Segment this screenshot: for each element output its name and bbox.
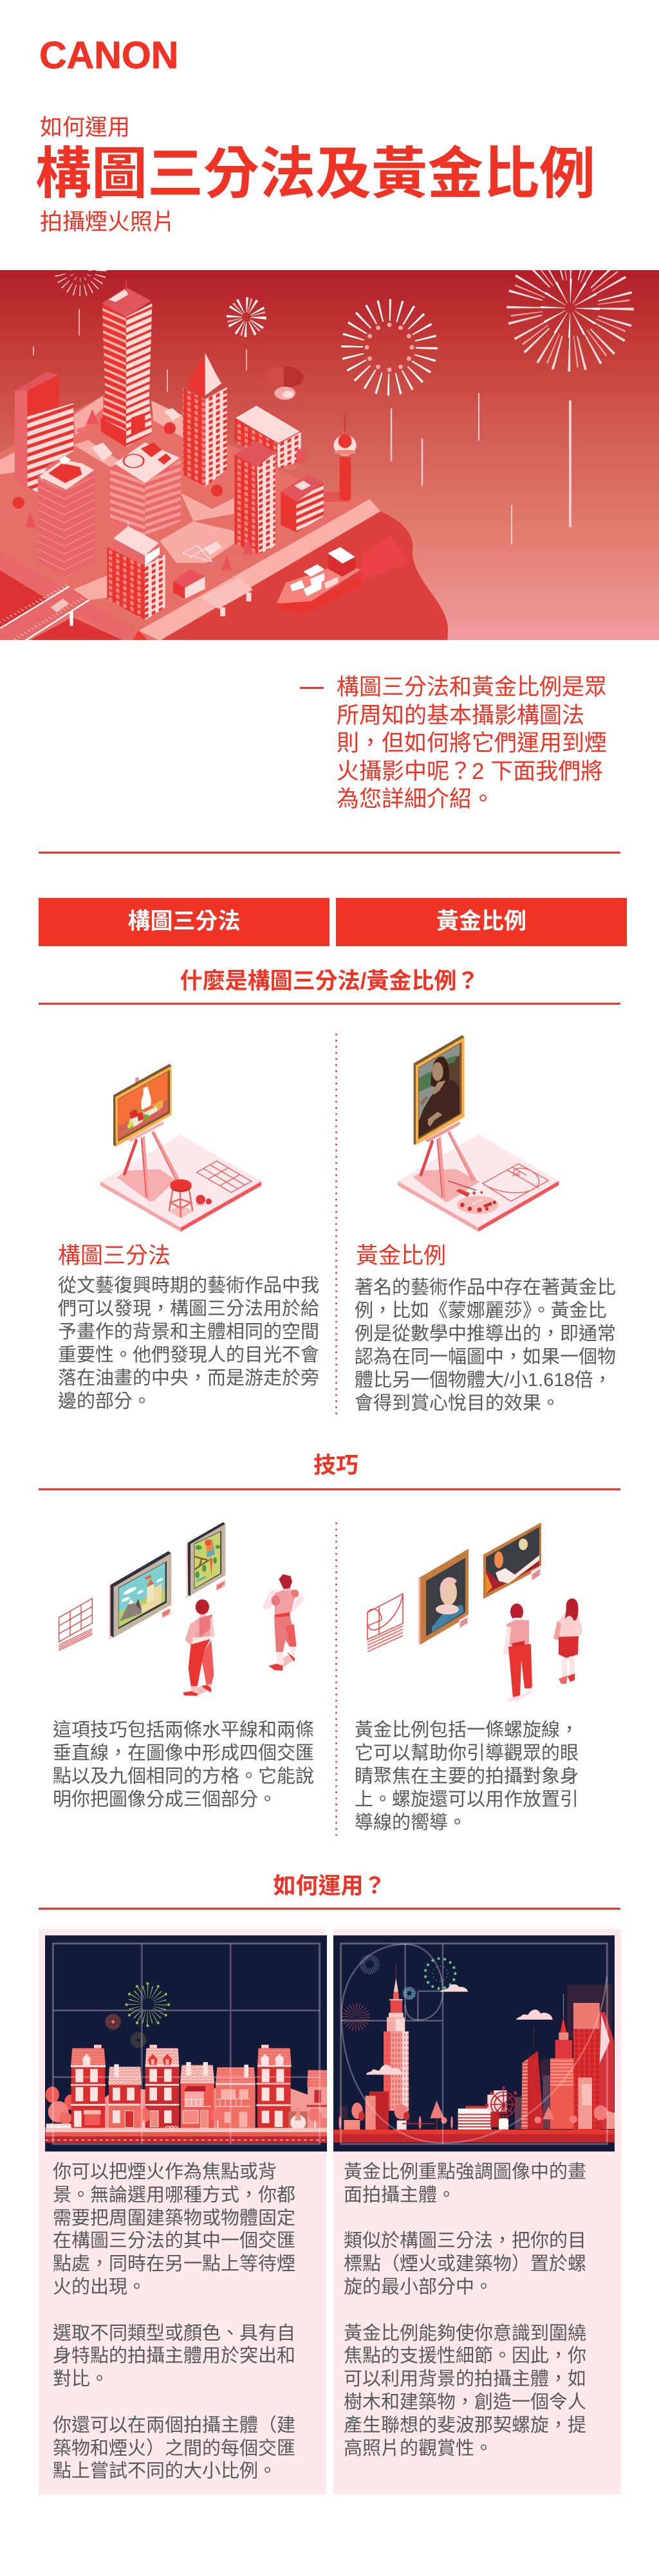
body: golden usage: 黃金比例重點強調圖像中的畫 面拍攝主體。 類似於構圖三分法，把你的目 標點（煙火或建築物）置於螺 旋的最小部分中。 黃金比例能夠使你意識到圍繞 焦點的支援性細節。因此，你 可以利用背景的拍攝主體，如 樹木和建築物，創造一個令人 產生聯想的斐波那契螺旋，提 高照片的觀賞性。 xyxy=(344,2162,586,2459)
tab: golden ratio xyxy=(336,898,627,946)
firework: faint white xyxy=(362,1957,376,1971)
panel: thirds usage background xyxy=(39,1929,326,2494)
logo: Canon: CANON xyxy=(39,34,178,77)
illustration: skyline with fireworks and golden spiral xyxy=(333,1935,615,2151)
stool xyxy=(169,1180,193,1218)
easel legs xyxy=(421,1121,476,1198)
body: rule of thirds: 從文藝復興時期的藝術作品中我 們可以發現，構圖三分法用於給 予畫作的背景和主體相同的空間 重要性。他們發現人的目光不會 落在油畫的中央，而是游走於旁 邊的部分。 xyxy=(58,1275,319,1412)
building: front window block xyxy=(107,521,165,620)
intro dash xyxy=(300,687,324,689)
building: flat roof block xyxy=(234,405,301,468)
illustration: easel with Mona Lisa and golden spiral xyxy=(398,1035,559,1232)
canvas: still life painting xyxy=(113,1064,172,1147)
promenade xyxy=(138,499,380,641)
spiral chart on wall xyxy=(367,1594,403,1652)
tab: golden ratio: 黃金比例 xyxy=(436,909,526,934)
body: thirds usage: 你可以把煙火作為焦點或背 景。無論選用哪種方式，你都 需要把周圍建築物或物體固定 在構圖三分法的其中一個交匯 點處，同時在另一點上等待煙 火的出現。 選取不同類型或顏色、具有自 身特點的拍攝主體用於突出和 對比。 你還可以在兩個拍攝主體（建 築物和煙火）之間的每個交匯 點上嘗試不同的大小比例。 xyxy=(53,2162,295,2481)
trees xyxy=(3,448,306,579)
painting label xyxy=(162,1608,171,1618)
house 2 xyxy=(108,2064,142,2128)
person: woman viewer xyxy=(553,1598,582,1684)
small house xyxy=(173,569,205,599)
firework: top left xyxy=(60,250,101,291)
painting: castle xyxy=(109,1551,172,1640)
low left blocks xyxy=(344,2092,389,2130)
building: main tall tower xyxy=(101,280,152,448)
balls xyxy=(196,1195,212,1206)
house 3 xyxy=(145,2045,179,2128)
golden spiral and grid overlay xyxy=(341,1944,607,2144)
firework: blue xyxy=(405,1989,414,1998)
rule of thirds grid overlay xyxy=(53,1944,320,2144)
body: golden ratio: 著名的藝術作品中存在著黃金比 例，比如《蒙娜麗莎》。黃金比 例是從數學中推導出的，即通常 認為在同一幅圖中，如果一個物 體比另一個物體大/小1.618倍， 會得到賞心悅目的效果。 xyxy=(355,1277,616,1414)
body: technique golden ratio: 黃金比例包括一條螺旋線， 它可以幫助你引導觀眾的眼 睛聚焦在主要的拍攝對象身 上。螺旋還可以用作放置引 導線的嚮導。 xyxy=(355,1720,579,1833)
brush and paint tube xyxy=(449,1181,483,1197)
person: man viewer xyxy=(503,1603,532,1701)
firework: orange xyxy=(107,2016,118,2027)
upper cloud xyxy=(440,1984,468,1992)
panel: golden usage background xyxy=(333,1929,621,2494)
thirds grid chart on wall xyxy=(59,1598,92,1650)
firework: red star xyxy=(349,2009,364,2025)
glass tower right xyxy=(573,2003,600,2130)
right trees xyxy=(534,2105,608,2130)
firework: green dots xyxy=(425,1959,455,1989)
building: tall front tower xyxy=(234,441,275,554)
golden spiral on floor xyxy=(483,1164,548,1201)
skyline back blocks xyxy=(339,1985,612,2129)
firework: yellow xyxy=(134,2035,143,2045)
painting label xyxy=(531,1566,541,1582)
left trees and fence xyxy=(46,2087,77,2131)
easel legs xyxy=(124,1121,180,1198)
intro text: 構圖三分法和黃金比例是眾 所周知的基本攝影構圖法 則，但如何將它們運用到煙 火攝影中呢？2 下面我們將 為您詳細介紹。 xyxy=(337,675,607,812)
building: curved tower center with helipad xyxy=(110,443,181,536)
diagonal avenue xyxy=(0,552,148,641)
right cloud xyxy=(516,2009,553,2020)
heading: how to use: 如何運用？ xyxy=(273,1874,386,1899)
tab: rule of thirds: 構圖三分法 xyxy=(127,909,241,934)
title: 構圖三分法及黃金比例 xyxy=(35,143,595,205)
painting label xyxy=(459,1614,469,1629)
gate between houses xyxy=(288,2105,308,2130)
subtitle: 拍攝煙火照片 xyxy=(40,210,175,235)
bridge with railings xyxy=(0,585,89,641)
hill and background xyxy=(103,2088,308,2129)
thirds grid on floor xyxy=(197,1161,252,1192)
house 1 xyxy=(71,2045,106,2128)
sky background xyxy=(0,270,659,640)
roads xyxy=(0,396,234,600)
painting: portrait of woman xyxy=(418,1549,469,1645)
kicker text: 如何運用 xyxy=(40,115,130,140)
blimp xyxy=(263,367,304,400)
pier xyxy=(201,578,253,616)
painting: parrot xyxy=(186,1522,226,1599)
city artwork xyxy=(0,280,448,641)
tree cluster back xyxy=(77,409,176,441)
heading: technique: 技巧 xyxy=(313,1453,358,1478)
subheading: rule of thirds: 構圖三分法 xyxy=(58,1243,171,1268)
tower with spire right xyxy=(550,1994,577,2129)
platform xyxy=(100,1135,261,1232)
house 7 xyxy=(307,2070,328,2129)
canvas: Mona Lisa xyxy=(414,1035,465,1145)
firework: small center xyxy=(234,305,259,329)
platform xyxy=(398,1134,559,1232)
house 5 xyxy=(216,2065,255,2128)
house 6 xyxy=(256,2045,292,2128)
firework: medium center xyxy=(352,310,427,385)
rising firework trails xyxy=(33,309,570,544)
ground band xyxy=(333,2130,615,2142)
dark corner land xyxy=(0,571,67,639)
land xyxy=(0,396,380,641)
cargo ship xyxy=(277,547,362,614)
body: technique rule of thirds: 這項技巧包括兩條水平線和兩條 垂直線，在圖像中形成四個交匯 點以及九個相同的方格。它能說 明你把圖像分成三個部分。 xyxy=(53,1720,314,1810)
easel peg xyxy=(135,1077,140,1084)
building: curved tower front left xyxy=(38,456,95,578)
ship wake xyxy=(362,534,410,580)
firework: large top right xyxy=(524,262,617,354)
sea xyxy=(160,511,448,641)
tall tower left xyxy=(384,1965,409,2111)
firework: green xyxy=(127,1984,169,2025)
ferris wheel xyxy=(485,2087,517,2130)
building: striped curved tower xyxy=(27,403,73,493)
street trees xyxy=(136,2108,322,2134)
painting: reclining figure xyxy=(483,1522,541,1599)
building: small office xyxy=(281,474,324,533)
parked cars and road crossing xyxy=(91,443,222,562)
illustration: easel with still life and thirds grid xyxy=(100,1064,261,1232)
curved skyscraper xyxy=(521,2028,544,2129)
building: spire tower xyxy=(183,352,227,487)
paint palette xyxy=(457,1196,499,1214)
road xyxy=(46,2128,327,2143)
low river bridge xyxy=(402,2122,434,2125)
tab: rule of thirds xyxy=(39,898,330,946)
house 4 xyxy=(180,2062,214,2128)
building: slab back left xyxy=(15,372,59,488)
striped low building xyxy=(458,2106,499,2130)
illustration: street with fireworks and thirds grid xyxy=(45,1935,327,2151)
illustration: gallery viewers with thirds paintings xyxy=(59,1522,305,1696)
observation tower xyxy=(324,414,357,502)
illustration: gallery viewers with golden ratio paintings xyxy=(367,1522,582,1701)
hero illustration: isometric city with fireworks xyxy=(0,270,659,640)
car on road xyxy=(164,408,181,421)
left trees xyxy=(339,2101,453,2130)
bicycle xyxy=(165,2126,178,2132)
cloud over tower xyxy=(366,2065,403,2075)
painting label xyxy=(216,1580,225,1591)
subheading: golden ratio: 黃金比例 xyxy=(356,1243,446,1268)
person: left viewer xyxy=(183,1600,214,1696)
angled tower right xyxy=(600,2012,615,2129)
heading: what is: 什麼是構圖三分法/黃金比例？ xyxy=(180,969,479,994)
person: right viewer xyxy=(263,1574,305,1670)
